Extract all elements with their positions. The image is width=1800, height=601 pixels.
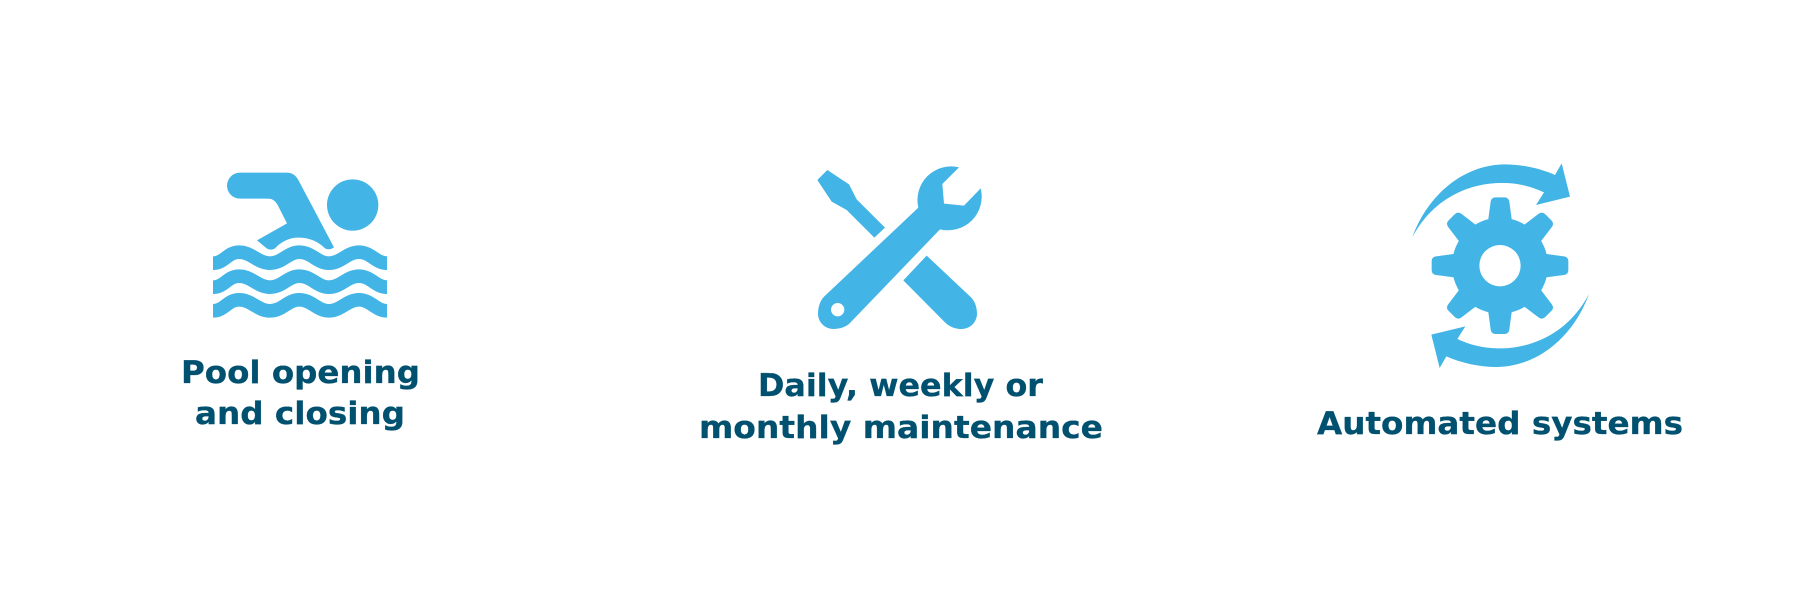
arrow: upper [1412,163,1570,237]
icon: gear with circular arrows [1412,163,1589,368]
icon: swimmer in water [213,173,387,311]
swimmer arm and body [227,173,334,250]
panel: daily, weekly or monthly maintenance [699,166,1103,446]
water waves [213,252,387,311]
wrench [818,166,982,329]
heading: pool opening and closing: Pool opening [181,355,420,391]
screwdriver lower section [903,256,977,329]
swimmer head [327,179,378,231]
heading: daily, weekly or monthly maintenance: Daily, weekly or [758,368,1043,404]
wrench hole [831,303,844,316]
arrow: lower [1431,294,1589,368]
gear [1432,197,1568,334]
heading: pool opening and closing: and closing [195,396,405,432]
heading: daily, weekly or monthly maintenance: monthly maintenance [699,410,1103,446]
heading: pool opening and closing [181,355,420,432]
panel: automated systems [1317,163,1683,442]
heading: automated systems: Automated systems [1317,406,1683,442]
icon: crossed wrench and screwdriver [817,166,982,329]
panel: pool opening and closing [181,173,420,432]
heading: daily, weekly or monthly maintenance [699,368,1103,446]
screwdriver handle end [817,170,885,238]
